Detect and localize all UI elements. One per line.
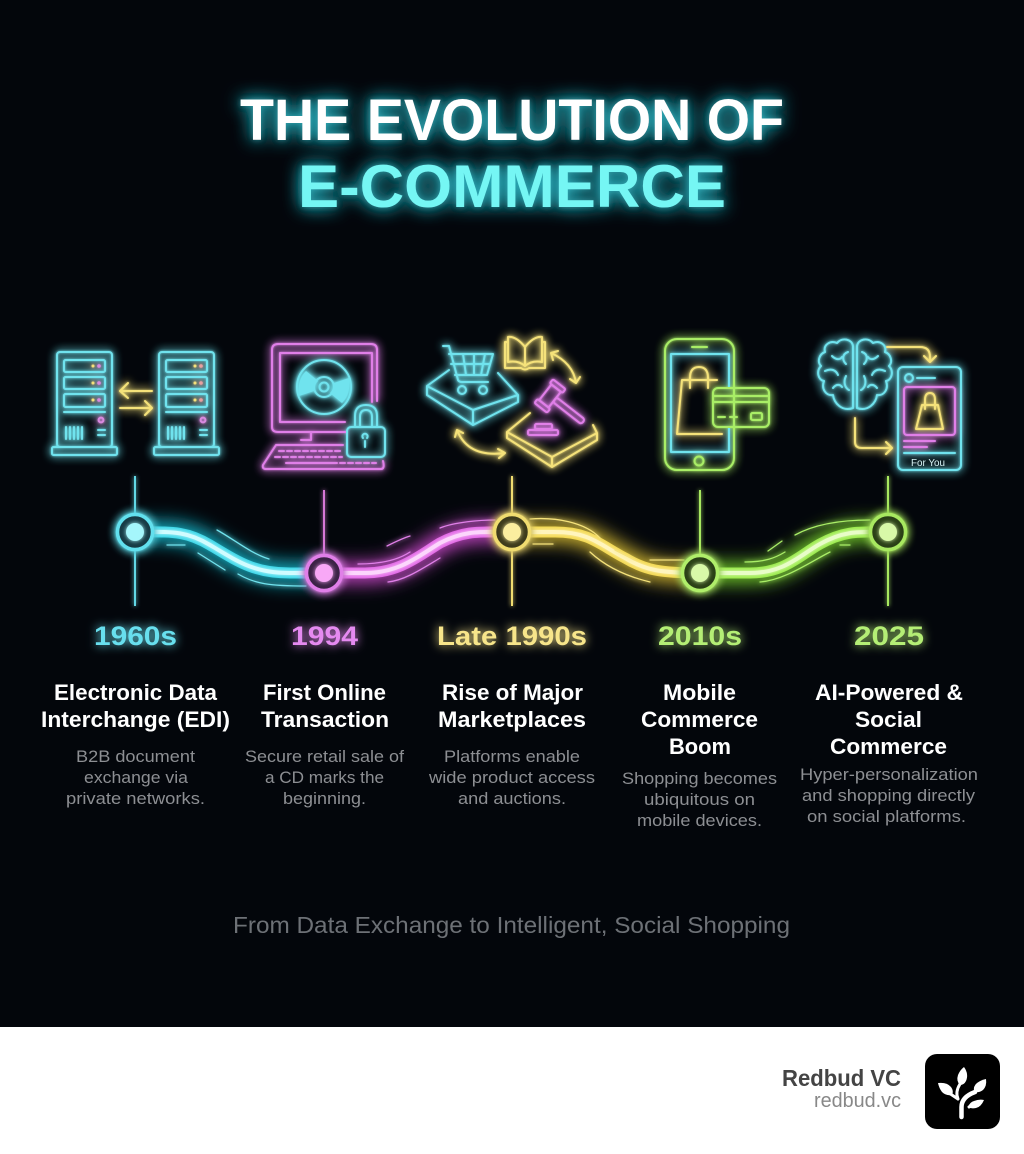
vertical stems <box>135 476 888 606</box>
description: beginning. <box>283 789 366 808</box>
icon: marketplace platforms, cart, book and gavel <box>427 337 597 467</box>
heading: Commerce <box>641 707 758 732</box>
milestone: 1960s <box>41 621 230 808</box>
milestone: 2010s <box>622 621 777 830</box>
description: Platforms enable <box>444 747 580 766</box>
description <box>66 747 205 808</box>
node 5 <box>870 514 906 550</box>
icon: AI brain with personalized feed card <box>818 339 961 470</box>
milestone: 2025 <box>800 621 978 826</box>
heading <box>261 680 389 732</box>
description <box>800 765 978 826</box>
description: Shopping becomes <box>622 769 777 788</box>
wavy glowing path: bright core <box>135 532 888 573</box>
heading: Boom <box>669 734 731 759</box>
timeline <box>118 476 906 606</box>
year: 1960s <box>94 621 177 651</box>
description <box>245 747 404 808</box>
heading <box>815 680 963 759</box>
wavy glowing path: tube <box>135 532 888 573</box>
logo: plant sprig <box>925 1054 1000 1129</box>
heading: Rise of Major <box>442 680 583 705</box>
heading: AI-Powered & <box>815 680 963 705</box>
icon: two servers exchanging data <box>52 352 219 455</box>
heading: First Online <box>263 680 386 705</box>
heading: Marketplaces <box>438 707 586 732</box>
milestone: Late 1990s <box>428 621 595 808</box>
description: mobile devices. <box>637 811 762 830</box>
footer band <box>0 1027 1024 1154</box>
description <box>428 747 595 808</box>
description: a CD marks the <box>265 768 384 787</box>
milestone: 1994 <box>245 621 404 808</box>
icon: computer with CD and lock <box>263 344 385 469</box>
description: private networks. <box>66 789 205 808</box>
speed lines <box>167 519 870 586</box>
node 2 <box>306 556 342 590</box>
year: 1994 <box>291 621 358 651</box>
heading: Electronic Data <box>54 680 218 705</box>
title: THE EVOLUTION OF <box>240 88 784 153</box>
heading: Commerce <box>830 734 947 759</box>
heading: Transaction <box>261 707 389 732</box>
year: Late 1990s <box>437 621 587 651</box>
description: exchange via <box>84 768 189 787</box>
title <box>240 88 784 220</box>
brand name: Redbud VC <box>782 1065 901 1091</box>
icon label: For You: For You <box>911 457 945 469</box>
icon: phone with shopping bag and card <box>665 339 769 470</box>
node 4 <box>682 556 718 590</box>
description: and auctions. <box>458 789 566 808</box>
description: Hyper-personalization <box>800 765 978 784</box>
brand url: redbud.vc <box>814 1090 901 1112</box>
description <box>622 769 777 830</box>
heading: Mobile <box>663 680 736 705</box>
tagline: From Data Exchange to Intelligent, Social Shopping <box>233 912 790 938</box>
description: Secure retail sale of <box>245 747 404 766</box>
year: 2010s <box>658 621 742 651</box>
description: B2B document <box>76 747 195 766</box>
wavy glowing path: glow layer <box>135 532 888 573</box>
node 1 <box>118 514 152 550</box>
description: on social platforms. <box>807 807 966 826</box>
title: E-COMMERCE <box>298 153 726 220</box>
heading <box>438 680 586 732</box>
heading: Social <box>855 707 922 732</box>
heading <box>641 680 758 759</box>
description: and shopping directly <box>802 786 976 805</box>
node 3 <box>494 514 530 550</box>
year: 2025 <box>854 621 924 651</box>
description: ubiquitous on <box>644 790 755 809</box>
description: wide product access <box>428 768 595 787</box>
heading <box>41 680 230 732</box>
heading: Interchange (EDI) <box>41 707 230 732</box>
